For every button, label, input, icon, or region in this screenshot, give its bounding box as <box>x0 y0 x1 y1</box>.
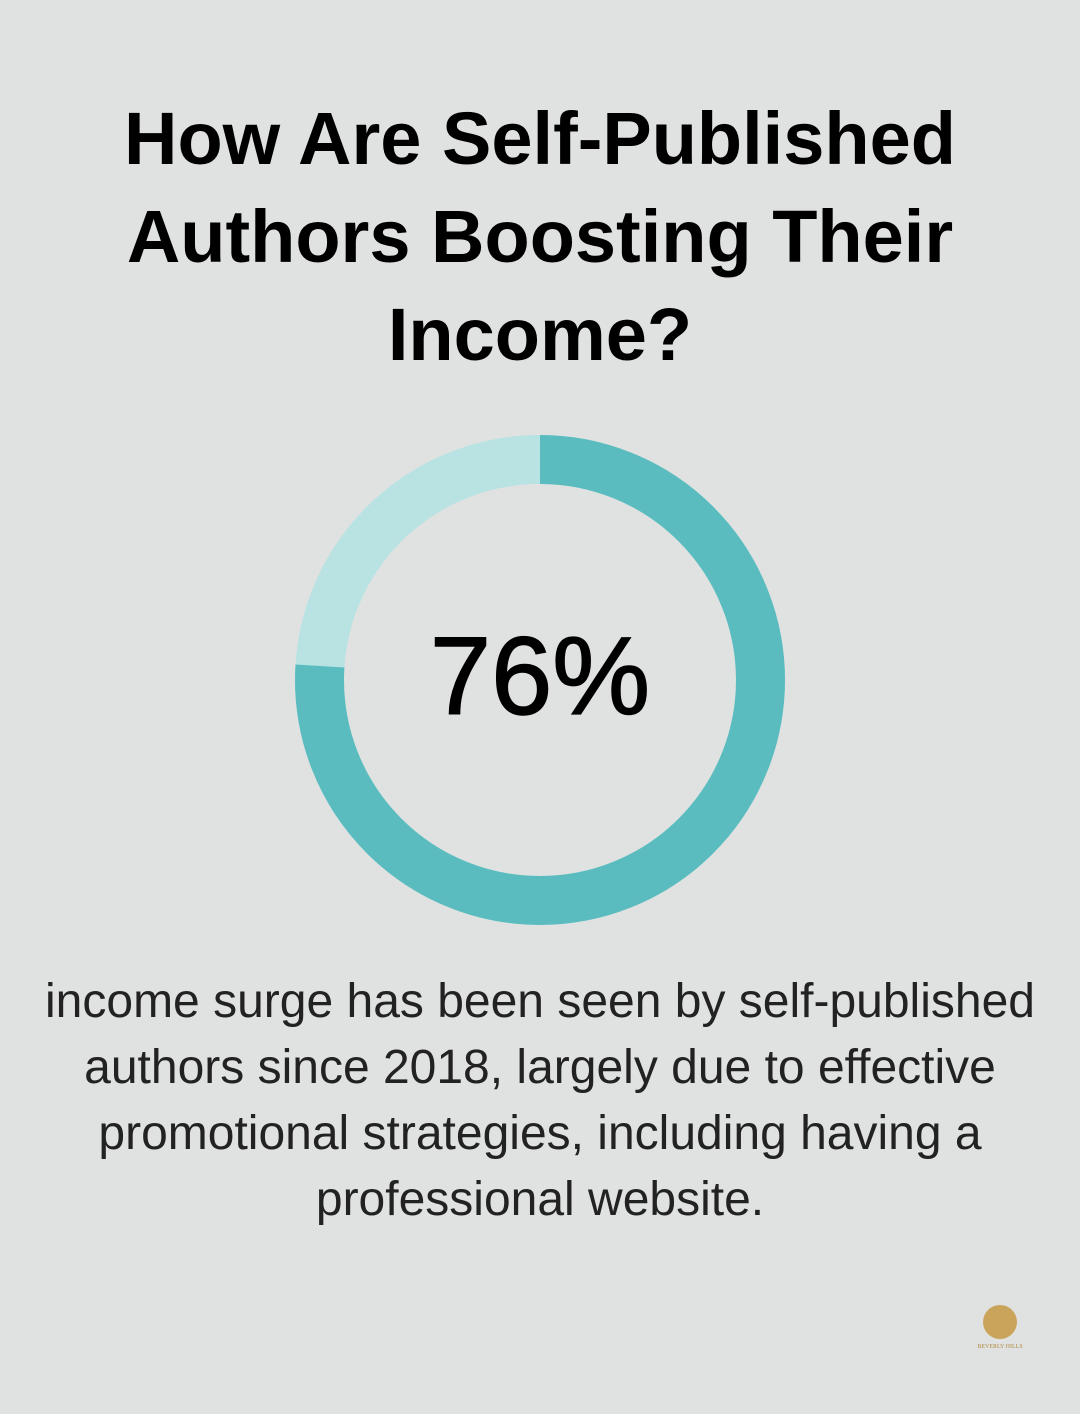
logo <box>977 1305 1023 1350</box>
title <box>124 97 956 376</box>
description text: income surge has been seen by self-published <box>45 975 1035 1028</box>
title: How Are Self-Published <box>124 97 956 180</box>
description text: authors since 2018, largely due to effective <box>84 1041 996 1094</box>
description text <box>45 975 1035 1226</box>
title: Authors Boosting Their <box>127 195 953 278</box>
description text: promotional strategies, including having a <box>98 1107 982 1160</box>
title: Income? <box>388 293 692 376</box>
donut chart: 76% <box>430 615 650 738</box>
description text: professional website. <box>316 1173 764 1226</box>
logo: BEVERLY HILLS <box>977 1344 1023 1350</box>
